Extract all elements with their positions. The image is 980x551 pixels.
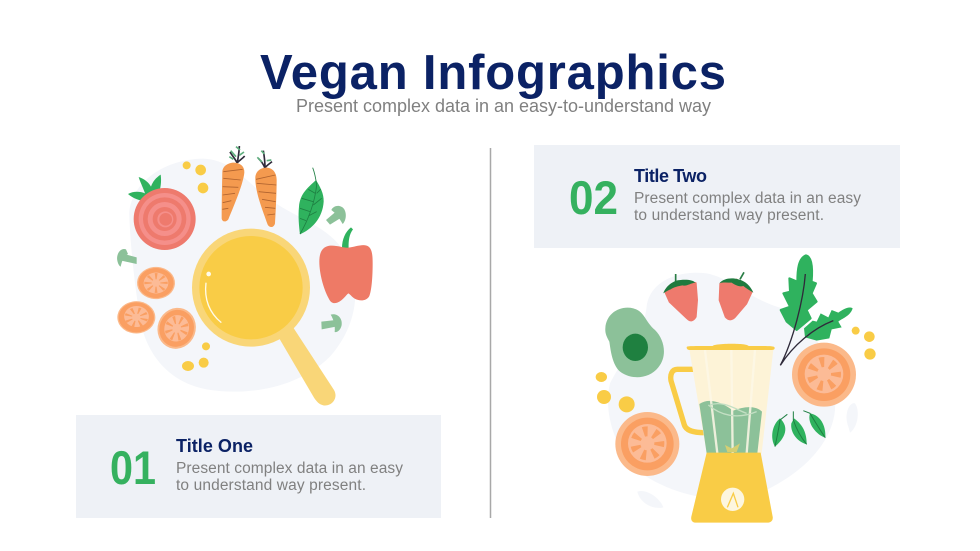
- icon: magnifying glass: [192, 229, 335, 405]
- icon: carrots: [222, 146, 277, 227]
- panel: title two card: [534, 145, 900, 248]
- icon: yellow seeds: [596, 327, 876, 412]
- illustration: blender with fruit: [596, 255, 876, 523]
- panel: title one card: [76, 415, 441, 518]
- illustration: magnifying glass with vegetables: [114, 146, 373, 405]
- icon: mushrooms: [117, 206, 346, 332]
- heading: title two: Title Two: [634, 166, 707, 186]
- icon: orange slices: [615, 343, 856, 476]
- icon: leaf: [299, 168, 324, 234]
- icon: orange slices: [114, 265, 202, 354]
- heading: title one: Title One: [176, 436, 253, 456]
- icon: blender: [671, 344, 775, 523]
- icon: small leaves: [772, 411, 825, 447]
- number 02: 02: [569, 171, 618, 224]
- icon: avocado: [605, 308, 664, 377]
- card two body text: to understand way present.: [634, 207, 824, 224]
- card one body text: Present complex data in an easy: [176, 460, 403, 477]
- card one body text: to understand way present.: [176, 477, 366, 494]
- subtitle: Present complex data in an easy-to-understand way: [296, 96, 711, 116]
- number 01: 01: [110, 441, 156, 494]
- icon: bell pepper: [319, 227, 373, 303]
- icon: arugula leaves: [780, 255, 853, 365]
- icon: beetroot: [128, 175, 196, 250]
- title: Vegan Infographics: [260, 46, 726, 100]
- icon: strawberries: [663, 272, 753, 320]
- card two body text: Present complex data in an easy: [634, 190, 861, 207]
- icon: yellow seeds: [182, 161, 210, 371]
